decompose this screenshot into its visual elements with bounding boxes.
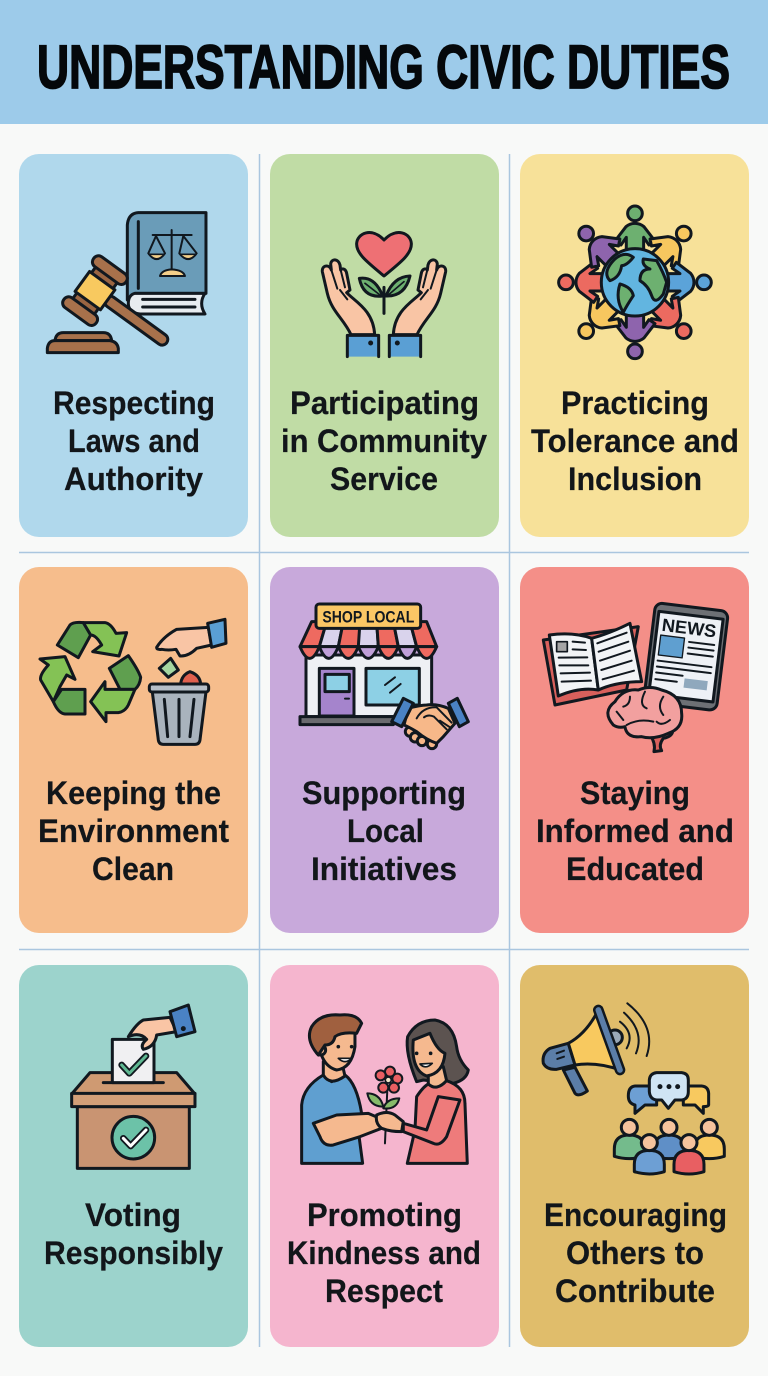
label bbox=[531, 385, 739, 497]
icon: local shop with handshake: SHOP LOCAL bbox=[322, 607, 414, 626]
label: Responsibly bbox=[44, 1235, 223, 1271]
label: Authority bbox=[64, 461, 203, 497]
icon: megaphone, speech bubbles and group bbox=[543, 1003, 724, 1174]
label: Others to bbox=[566, 1235, 704, 1271]
panel: voting responsibly bbox=[19, 965, 248, 1347]
label bbox=[544, 1197, 727, 1309]
label: Tolerance and bbox=[531, 423, 739, 459]
panel: respecting laws bbox=[19, 154, 248, 537]
label: Service bbox=[330, 461, 438, 497]
label: in Community bbox=[281, 423, 487, 459]
label bbox=[53, 385, 215, 497]
icon: book, news tablet and brain bbox=[543, 603, 728, 752]
panel: tolerance and inclusion bbox=[520, 154, 749, 537]
label: Kindness and bbox=[287, 1235, 481, 1271]
label: Local bbox=[347, 813, 424, 849]
label: Voting bbox=[85, 1197, 181, 1233]
label: Initiatives bbox=[311, 851, 457, 887]
label: Contribute bbox=[555, 1273, 715, 1309]
label: Promoting bbox=[307, 1197, 462, 1233]
panel: staying informed bbox=[520, 567, 749, 933]
label: Inclusion bbox=[568, 461, 702, 497]
panel: kindness and respect bbox=[270, 965, 499, 1347]
icon: local shop with handshake bbox=[300, 604, 468, 749]
panel: encouraging others bbox=[520, 965, 749, 1347]
label: Respect bbox=[325, 1273, 443, 1309]
icon: people around globe bbox=[559, 206, 711, 359]
label bbox=[287, 1197, 481, 1309]
label: Informed and bbox=[536, 813, 734, 849]
label: Staying bbox=[580, 775, 690, 811]
panel: keeping environment clean bbox=[19, 567, 248, 933]
icon: gavel and law book bbox=[47, 213, 206, 368]
label: Environment bbox=[38, 813, 229, 849]
label bbox=[302, 775, 466, 887]
label: Respecting bbox=[53, 385, 215, 421]
label: Supporting bbox=[302, 775, 466, 811]
icon: hands holding heart and sprout bbox=[322, 233, 446, 357]
icon: recycling symbol and trash bin bbox=[40, 619, 226, 744]
label bbox=[38, 775, 229, 887]
label: Laws and bbox=[68, 423, 200, 459]
label bbox=[281, 385, 487, 497]
panel: community service bbox=[270, 154, 499, 537]
icon: two people sharing a flower bbox=[302, 1015, 468, 1163]
label: Educated bbox=[566, 851, 704, 887]
panel: supporting local initiatives bbox=[270, 567, 499, 933]
label: Keeping the bbox=[46, 775, 221, 811]
icon: book, news tablet and brain: NEWS bbox=[661, 615, 717, 641]
label bbox=[536, 775, 734, 887]
label: Encouraging bbox=[544, 1197, 727, 1233]
icon: ballot box and hand bbox=[72, 1005, 195, 1168]
label bbox=[44, 1197, 223, 1271]
label: Practicing bbox=[561, 385, 709, 421]
label: Clean bbox=[92, 851, 174, 887]
header banner bbox=[0, 0, 768, 124]
label: Participating bbox=[290, 385, 479, 421]
